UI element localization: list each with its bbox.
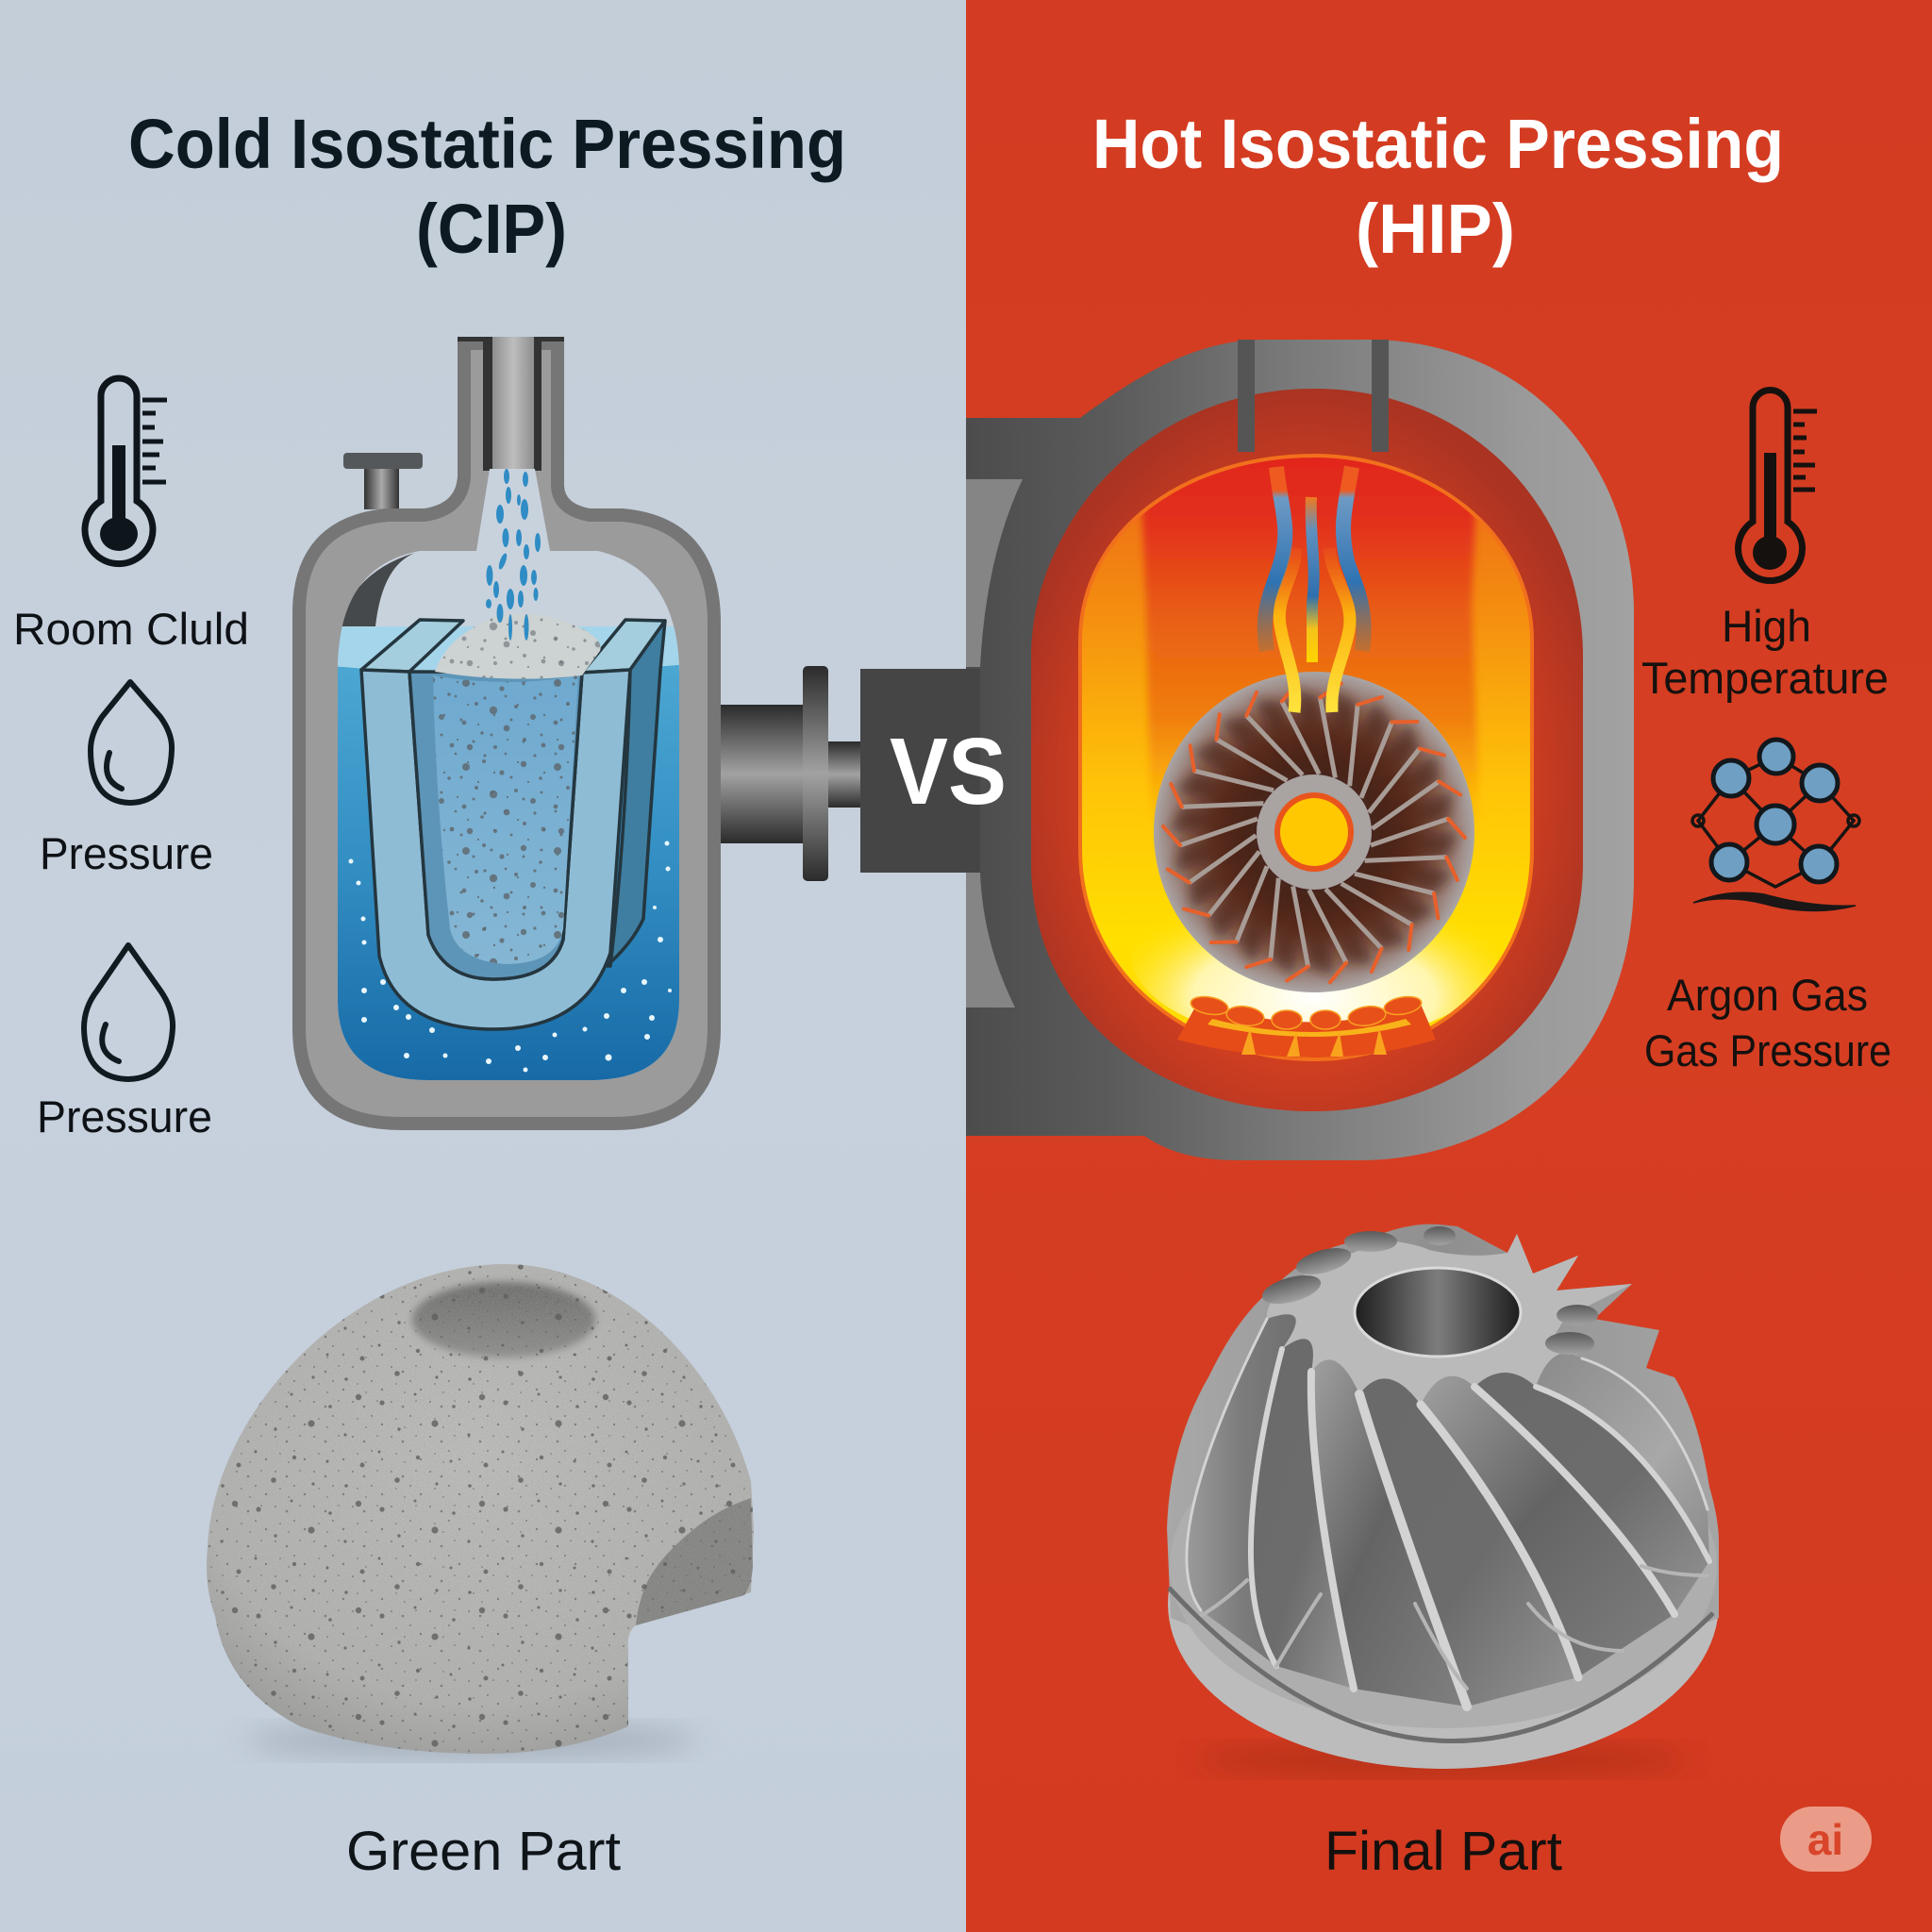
label: high temperature	[1641, 601, 1889, 703]
icon: room temperature thermometer	[85, 378, 167, 564]
base groove line	[1169, 1588, 1713, 1741]
panel: cold pressing background	[0, 0, 966, 1932]
furnace housing	[966, 340, 1634, 1160]
crucible	[361, 620, 665, 1029]
label: room cluld: Room Cluld	[13, 604, 249, 654]
water bubbles	[349, 841, 672, 1072]
connecting pipe with flange	[721, 666, 860, 881]
falling powder droplets	[486, 469, 541, 641]
label: green part: Green Part	[346, 1821, 621, 1882]
gas and flame streams	[1265, 467, 1364, 712]
title: hot isostatic pressing	[1092, 105, 1784, 268]
label: pressure one: Pressure	[40, 828, 213, 878]
vs badge	[860, 669, 1007, 873]
title: hot isostatic pressing: Hot Isostatic Pressing	[1092, 105, 1784, 183]
title: cold isostatic pressing	[128, 105, 846, 268]
water and crucible	[330, 553, 689, 1085]
label: argon gas pressure: Argon Gas	[1667, 970, 1868, 1020]
label: pressure two: Pressure	[37, 1091, 212, 1141]
back scalloped pockets	[1259, 1226, 1598, 1355]
lower hub platform	[1170, 1404, 1717, 1728]
final part: machined impeller	[1167, 1224, 1719, 1776]
label: final part: Final Part	[1324, 1821, 1562, 1882]
centre bore	[1355, 1268, 1521, 1357]
label: high temperature: High	[1722, 601, 1811, 651]
panel: hot pressing background	[966, 0, 1932, 1932]
icon: water drop two	[84, 945, 173, 1079]
powder in mould	[433, 613, 601, 964]
turbine impeller in furnace	[1154, 672, 1474, 992]
valve on vessel	[343, 453, 423, 509]
blade ridges	[1187, 1319, 1709, 1707]
base disc	[1168, 1439, 1719, 1769]
neck feed pipe	[458, 337, 564, 471]
diagram: hot isostatic pressing vessel	[966, 340, 1634, 1160]
label: high temperature: Temperature	[1641, 653, 1889, 703]
heating elements	[1177, 994, 1436, 1058]
blade grooves	[1187, 1314, 1709, 1707]
title: cold isostatic pressing: (CIP)	[416, 190, 567, 268]
title: hot isostatic pressing: (HIP)	[1356, 190, 1515, 268]
icon: argon gas molecule	[1692, 740, 1859, 911]
hot zone	[1080, 443, 1532, 1059]
green part: powder compact	[198, 1259, 764, 1759]
top face	[1267, 1234, 1632, 1410]
housing light panels	[966, 479, 1023, 1008]
body outline	[1167, 1224, 1719, 1726]
vessel cavity	[338, 469, 679, 1080]
icon: high temperature thermometer	[1738, 391, 1817, 581]
vs badge: VS	[890, 719, 1007, 824]
icon: water drop one	[91, 682, 172, 803]
badge: ai watermark: ai	[1807, 1815, 1843, 1864]
label: argon gas pressure	[1644, 970, 1891, 1075]
title: cold isostatic pressing: Cold Isostatic Pressing	[128, 105, 846, 183]
badge: ai watermark	[1780, 1807, 1872, 1872]
vessel rods	[1238, 340, 1389, 452]
vessel wall	[299, 343, 714, 1124]
chamber insulation	[1031, 389, 1583, 1111]
label: argon gas pressure: Gas Pressure	[1644, 1025, 1891, 1075]
diagram: cold isostatic pressing vessel	[299, 337, 714, 1124]
